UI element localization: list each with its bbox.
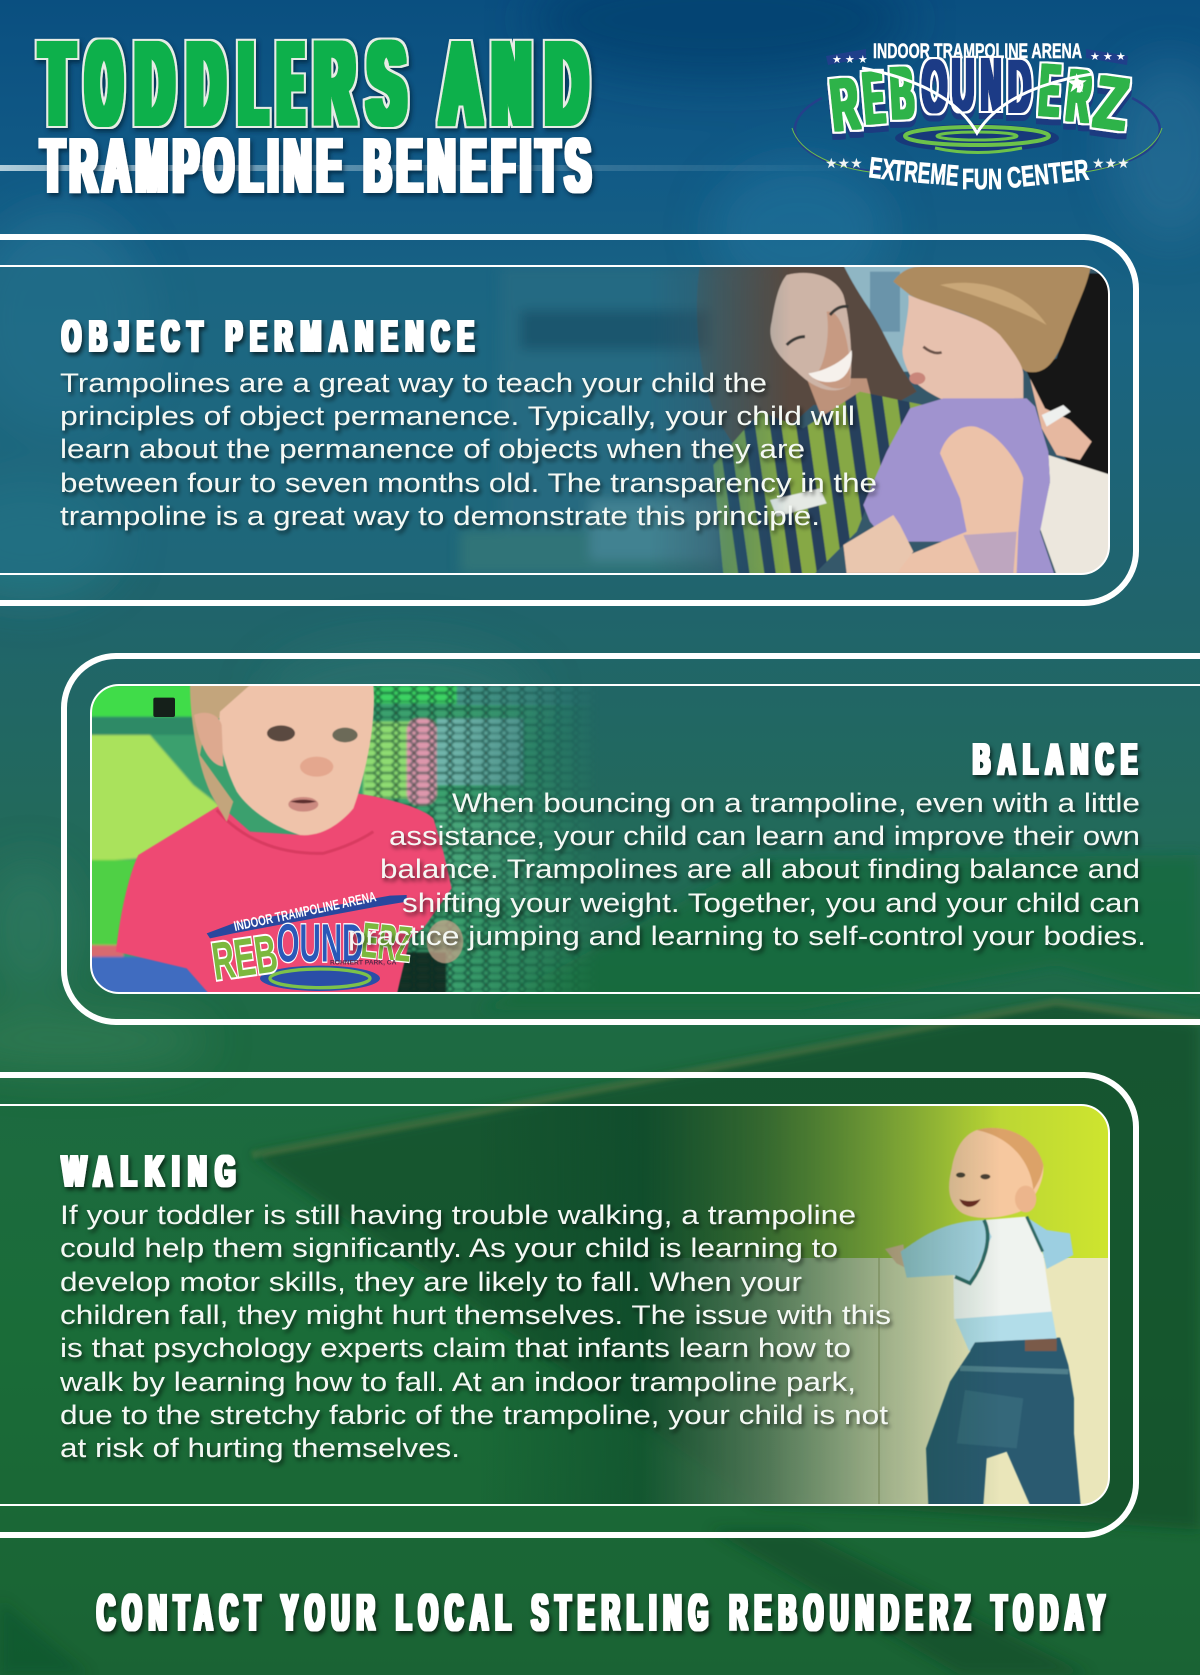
faded background of photo	[460, 270, 722, 573]
panel 3 body text: is that psychology experts claim that infants learn how to	[60, 1333, 851, 1363]
logo bottom line: EX	[867, 152, 897, 187]
toddler's hair	[190, 685, 250, 822]
logo: Rebounderz	[792, 40, 1162, 196]
shirt logo: INDOOR TRAMPOLINE ARENA	[232, 888, 377, 934]
title: D	[546, 18, 587, 150]
baby's mouth	[959, 1199, 981, 1207]
toddler's head	[219, 685, 374, 835]
logo wordmark letters: E	[1037, 48, 1063, 132]
right figure: forearm and wristband	[1030, 378, 1092, 460]
title line one: TODDLERS AND: L	[240, 18, 266, 150]
baby's eyes	[956, 1172, 965, 1178]
play area backdrop	[122, 686, 581, 992]
panel 1 body text: between four to seven months old. The transparency in the	[60, 468, 877, 498]
logo bottom stars	[825, 155, 1130, 171]
panel 2 body text: balance. Trampolines are all about finding balance and	[380, 854, 1140, 884]
panel 1 body text: learn about the permanence of objects when they are	[60, 434, 805, 464]
title line one: TODDLERS AND: N	[493, 18, 530, 150]
title line one: TODDLERS AND: O	[87, 18, 121, 150]
logo wordmark letters: Z	[1090, 60, 1133, 146]
right figure: black top	[1027, 273, 1109, 475]
text: TRAMPOLINE BENEFITS	[41, 123, 596, 209]
panel 1 body text	[60, 368, 877, 531]
logo trampoline swirl	[895, 124, 1059, 152]
shirt logo: ERZ	[359, 912, 414, 973]
panel 3 body text: children fall, they might hurt themselves. The issue with this	[60, 1300, 891, 1330]
panel 1 body text: principles of object permanence. Typically, your child will	[60, 401, 855, 431]
logo wordmark letters: E	[860, 56, 887, 140]
logo top line: INDOOR TRAMPOLINE ARENA	[873, 40, 1082, 63]
panel 2 inner frame	[91, 685, 1200, 993]
panel: walking	[0, 1075, 1136, 1535]
panel: balance	[64, 656, 1200, 1022]
toddler's nose	[300, 757, 333, 777]
shirt logo: REB	[208, 924, 281, 992]
name badge	[770, 488, 827, 517]
decorative glow line behind title	[0, 165, 880, 171]
logo bottom stars: ★★★	[1092, 155, 1130, 171]
panel 3 body text: If your toddler is still having trouble walking, a trampoline	[60, 1200, 856, 1230]
logo wordmark letters: U	[952, 43, 974, 126]
logo wordmark letters: O	[922, 45, 947, 128]
baby's hand	[885, 1244, 907, 1268]
woman's hair	[697, 267, 916, 443]
baby's ear	[1015, 1186, 1036, 1212]
panel 3 body text	[59, 1200, 891, 1463]
logo wordmark letters: D	[1008, 45, 1031, 128]
panel 3 photo area	[480, 1105, 1120, 1508]
child's face	[902, 295, 1023, 400]
panel 1 body text: Trampolines are a great way to teach your child the	[60, 368, 767, 398]
panel 1 outer frame	[0, 237, 1136, 603]
child's arm	[897, 426, 1023, 573]
panel 2 body text: shifting your weight. Together, you and your child can	[402, 888, 1140, 918]
logo wordmark letters: R	[827, 62, 863, 147]
logo top stars: ★ ★ ★	[1090, 51, 1126, 63]
child's dress	[863, 398, 1054, 573]
shirt logo: OUND	[277, 915, 363, 974]
title line one: TODDLERS AND: E	[279, 18, 302, 150]
title	[41, 18, 596, 209]
photo: woman and child	[640, 265, 1113, 575]
title line one: TODDLERS AND: D	[136, 18, 173, 150]
logo top stars	[826, 49, 1128, 66]
panel 2 body text: assistance, your child can learn and improve their own	[389, 821, 1140, 851]
logo wordmark letters: R	[1063, 53, 1095, 138]
logo bottom stars: ★★★	[825, 155, 863, 171]
toddler's eyes	[267, 725, 295, 741]
baby's left sleeve	[901, 1220, 992, 1282]
logo bottom line	[867, 152, 1090, 196]
photo: toddler in pink shirt	[92, 686, 576, 992]
child's hair	[893, 267, 1091, 372]
shirt logo: ROHNERT PARK, CA	[330, 959, 397, 966]
black block on play mat	[153, 698, 175, 717]
baby's shirt	[953, 1217, 1052, 1319]
panel 1 body text: trampoline is a great way to demonstrate this principle.	[60, 501, 820, 531]
toddler's collar shadow	[217, 810, 373, 853]
right figure: white pants	[1040, 455, 1109, 575]
title line one: TODDLERS AND: S	[368, 18, 405, 150]
woman's neck	[807, 378, 871, 417]
panel 2 body text: When bouncing on a trampoline, even with a little	[452, 788, 1140, 818]
logo bottom line: TREME	[891, 155, 960, 193]
panel 3 body text: due to the stretchy fabric of the trampoline, your child is not	[60, 1400, 889, 1430]
logo wordmark letters	[827, 43, 1133, 147]
logo bottom line: FUN	[962, 164, 1002, 196]
panel 2 body text	[348, 788, 1146, 951]
baby's jeans	[926, 1338, 1081, 1505]
photo: baby climbing sofa	[620, 1105, 1120, 1508]
shirt logo	[207, 888, 414, 992]
logo wordmark letters: B	[888, 51, 916, 135]
panel 3 body text: at risk of hurting themselves.	[60, 1433, 460, 1463]
toddler's hand	[427, 920, 463, 963]
title line one: TODDLERS AND: T	[41, 18, 73, 150]
title line one: TODDLERS AND	[41, 18, 587, 150]
panel: object permanence	[0, 237, 1136, 603]
panel 2 body text: practice jumping and learning to self-control your bodies.	[348, 921, 1146, 951]
baby's right sleeve	[1026, 1217, 1073, 1269]
panel 3 body text: develop motor skills, they are likely to fall. When your	[60, 1267, 802, 1297]
panel 2 outer frame	[64, 656, 1200, 1022]
toddler's mouth	[288, 797, 318, 812]
logo wordmark letters: N	[981, 43, 1001, 126]
title line one: TODDLERS AND: R	[315, 18, 354, 150]
panel 3 inner frame	[0, 1105, 1109, 1505]
logo ring arcs	[792, 98, 1162, 172]
panel 3 body text: walk by learning how to fall. At an indoor trampoline park,	[59, 1367, 856, 1397]
woman's hand	[843, 515, 913, 573]
panel 3 heading: WALKING	[62, 1147, 244, 1196]
baby's head	[949, 1128, 1043, 1218]
woman's blouse	[713, 392, 923, 575]
net	[364, 686, 578, 992]
title line one: TODDLERS AND: D	[188, 18, 224, 150]
panel 1 heading: OBJECT PERMANENCE	[62, 312, 482, 361]
toddler's shirt	[116, 793, 452, 995]
logo bottom line: CENTER	[1005, 155, 1090, 195]
panel 3 outer frame	[0, 1075, 1136, 1535]
panel 1 inner frame	[0, 266, 1109, 574]
logo top stars: ★ ★ ★	[832, 54, 868, 66]
panel 1 photo area	[122, 267, 1108, 573]
logo V arc	[862, 68, 1092, 133]
baby's undershirt	[955, 1310, 1057, 1352]
panel 3 body text: could help them significantly. As your child is learning to	[60, 1233, 838, 1263]
woman's face	[770, 273, 851, 390]
panel 2 photo area	[92, 686, 576, 992]
title line one: TODDLERS AND: A	[441, 18, 481, 150]
logo star: ★	[1065, 68, 1088, 98]
toddler's ear	[194, 713, 223, 767]
